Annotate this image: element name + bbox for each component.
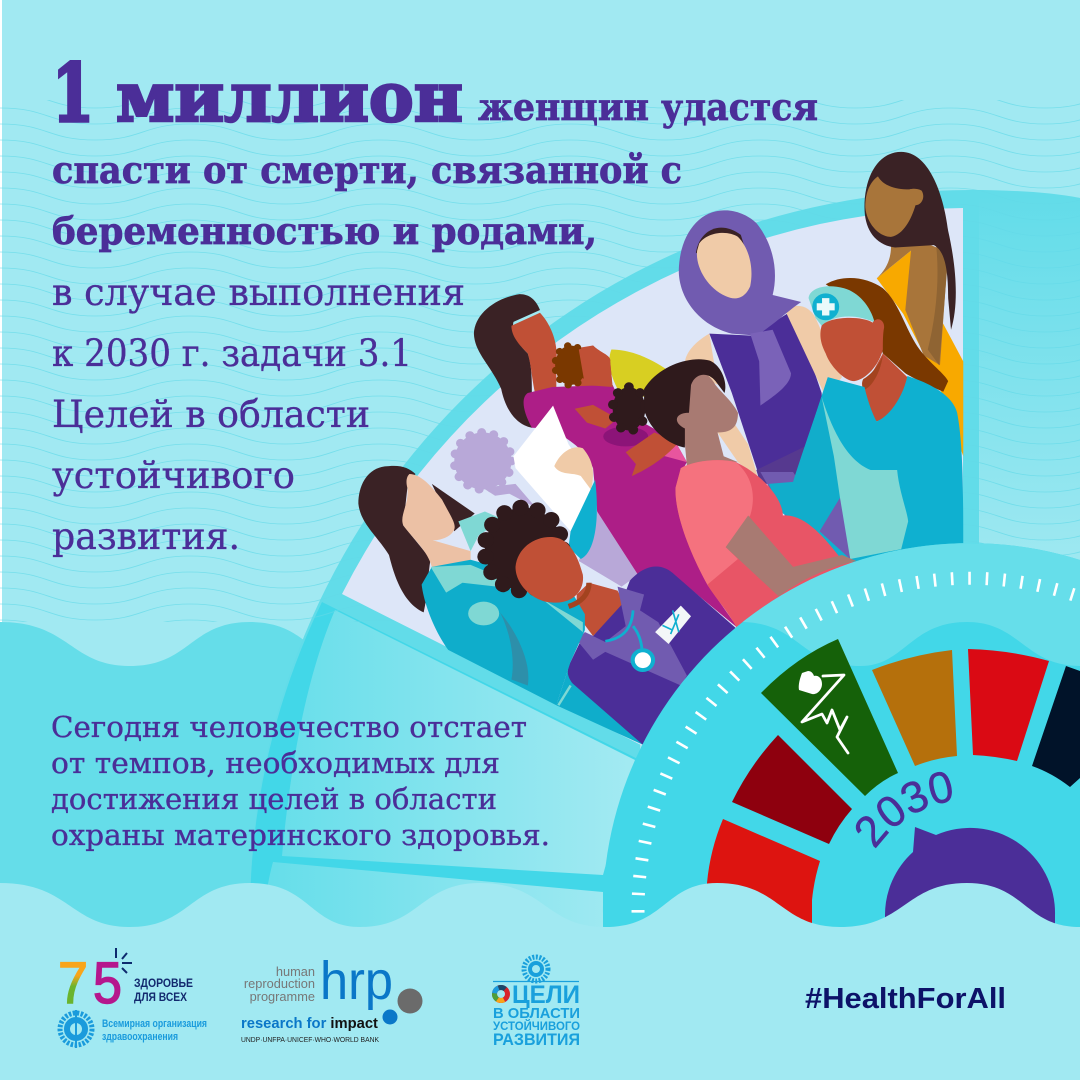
- heading: rest of line one: женщин удастся: [478, 85, 818, 129]
- ЦЕЛИ: ЦЕЛИ: [512, 981, 580, 1009]
- hrp small label: human: [276, 964, 315, 979]
- figure: woman in teal coat: [358, 466, 589, 705]
- logo sun rays: [116, 948, 132, 973]
- heading: [52, 46, 818, 253]
- segment: dark red: [732, 735, 852, 844]
- figure: woman in hijab: [678, 210, 842, 516]
- figure: pregnant woman: [613, 359, 856, 630]
- segment: bright red: [968, 649, 1049, 761]
- figure: woman in yellow dress: [864, 152, 963, 456]
- research for impact: research for impact: [241, 1016, 378, 1032]
- SDG wheel: [494, 988, 508, 1000]
- heading: digit 1: 1: [52, 46, 94, 140]
- figure: nurse with cap: [769, 278, 963, 575]
- body line four: устойчивого: [52, 454, 295, 497]
- panel: illustration backdrop: [342, 208, 963, 746]
- segment: navy: [1032, 666, 1080, 787]
- partners line: UNDP·UNFPA·UNICEF·WHO·WORLD BANK: [241, 1037, 379, 1044]
- figure: lilac speech blob: [454, 432, 638, 587]
- body text: [52, 271, 465, 558]
- secondary line four: охраны материнского здоровья.: [51, 818, 550, 852]
- fan band behind the illustration: [250, 190, 1080, 930]
- upper background wave: [0, 622, 640, 930]
- secondary text: [51, 710, 550, 852]
- icon: medical cross: [812, 293, 839, 320]
- hrp letters: hrp: [320, 951, 393, 1011]
- secondary line three: достижения целей в области: [51, 782, 497, 816]
- UN emblem: [524, 957, 548, 981]
- segment: ochre: [872, 650, 957, 766]
- heading: миллион: миллион: [116, 58, 463, 138]
- icon: heartbeat line: [802, 675, 848, 753]
- figure: doctor in purple coat: [556, 567, 736, 745]
- logo number 7: 7: [58, 951, 88, 1016]
- dial tick marks: [638, 578, 1080, 930]
- wave line texture: [0, 100, 1080, 622]
- grey dot: [398, 988, 422, 1014]
- WHO name second line: здравоохранения: [102, 1031, 178, 1043]
- body line one: в случае выполнения: [52, 271, 465, 314]
- logo: HRP: [241, 951, 422, 1044]
- hrp small label three: programme: [250, 989, 315, 1004]
- blue dot: [382, 1010, 398, 1024]
- icon: heart: [799, 671, 822, 694]
- WHO name: Всемирная организация: [102, 1018, 207, 1030]
- body line three: Целей в области: [52, 393, 370, 436]
- body line two: к 2030 г. задачи 3.1: [52, 332, 412, 375]
- logo: WHO 75: [58, 948, 207, 1048]
- В ОБЛАСТИ: В ОБЛАСТИ: [493, 1005, 580, 1022]
- label: 2030 on arc: 2030: [856, 772, 952, 848]
- logo number 5: 5: [93, 951, 122, 1016]
- rule: [493, 980, 579, 982]
- illustration: group of women: [358, 152, 963, 745]
- segment: red: [707, 819, 820, 930]
- bottom wave: [0, 883, 1080, 1080]
- hrp small label two: reproduction: [244, 976, 315, 991]
- logo caption second line: ДЛЯ ВСЕХ: [134, 990, 187, 1004]
- heading: line two: спасти от смерти, связанной с: [52, 148, 682, 192]
- heading: line three: беременностью и родами,: [52, 209, 597, 253]
- dial: [602, 543, 1080, 927]
- SDG segments: [707, 639, 1080, 930]
- segment: green with heartbeat icon: [761, 639, 898, 796]
- WHO emblem: [60, 1010, 92, 1048]
- УСТОЙЧИВОГО: УСТОЙЧИВОГО: [493, 1018, 580, 1033]
- figure: mother holding baby: [474, 294, 738, 628]
- body line five: развития.: [52, 515, 240, 558]
- purple dome pointer: [885, 827, 1055, 930]
- logo: SDG: [493, 957, 580, 1049]
- secondary line two: от темпов, необходимых для: [51, 746, 500, 780]
- hashtag: #HealthForAll: [805, 983, 1006, 1015]
- РАЗВИТИЯ: РАЗВИТИЯ: [493, 1031, 580, 1049]
- secondary line one: Сегодня человечество отстает: [51, 710, 527, 744]
- logo caption: ЗДОРОВЬЕ: [134, 976, 193, 990]
